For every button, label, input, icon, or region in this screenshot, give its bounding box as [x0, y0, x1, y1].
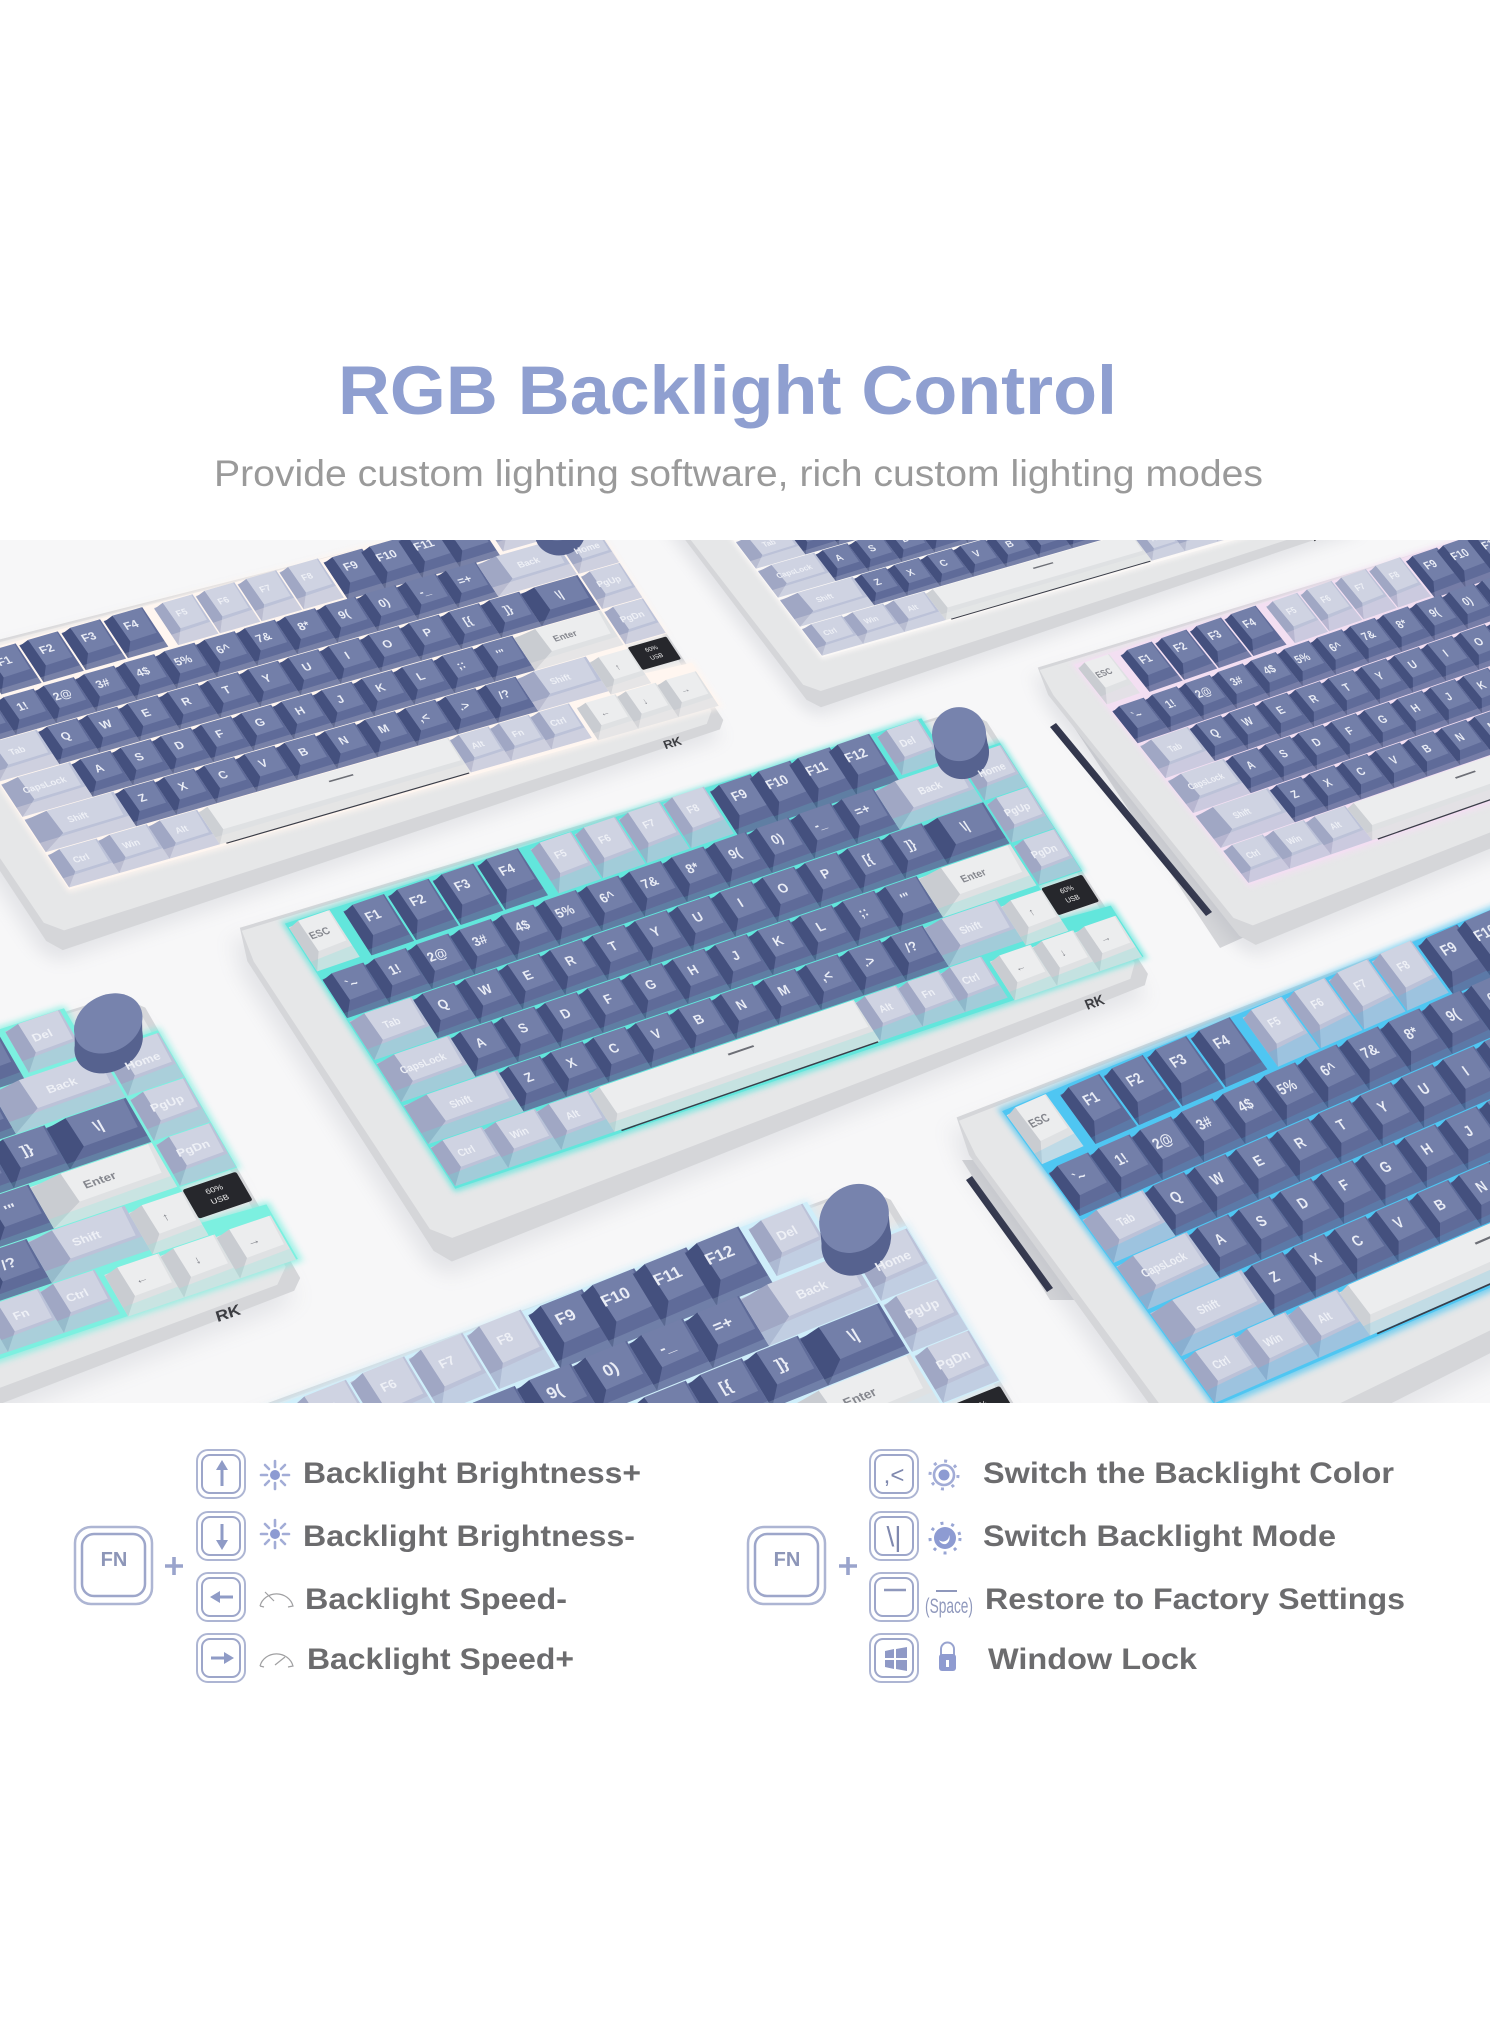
- keyboard: bottom centre, white-blue glow: [268, 1184, 1014, 1403]
- row: switch backlight mode: [870, 1512, 1336, 1560]
- row: switch backlight colour: Switch the Backlight Color: [983, 1457, 1394, 1490]
- row: backlight speed up: [197, 1634, 574, 1682]
- row: backlight speed up: Backlight Speed+: [307, 1643, 574, 1676]
- row: backlight brightness down: [197, 1512, 635, 1560]
- plus sign: [839, 1557, 857, 1575]
- row: backlight speed down: [197, 1573, 567, 1621]
- subtitle: Provide custom lighting software, rich custom lighting modes: [214, 453, 1263, 494]
- keyboard: top left, warm white glow: [0, 540, 724, 960]
- row: backlight brightness down: Backlight Brightness-: [303, 1520, 635, 1553]
- row: window lock: Window Lock: [988, 1643, 1197, 1676]
- title: RGB Backlight Control: [338, 352, 1117, 429]
- photo panel: keyboards with different backlight colours: [0, 540, 1490, 1403]
- row: restore to factory settings: [870, 1573, 1405, 1621]
- keyboard: bottom right, blue glow: [956, 902, 1490, 1403]
- row: restore to factory settings: (Space): [925, 1595, 973, 1618]
- row: switch backlight colour: ,<: [884, 1462, 904, 1489]
- keyboard side wall and underside: right: [1050, 723, 1242, 948]
- keyboard: centre, teal glow: [236, 707, 1150, 1274]
- FN key: [75, 1527, 152, 1604]
- row: backlight brightness up: [197, 1450, 641, 1498]
- row: window lock: [870, 1634, 1197, 1682]
- FN key: [748, 1527, 825, 1604]
- row: switch backlight mode: \|: [886, 1521, 902, 1552]
- row: backlight brightness up: Backlight Brightness+: [303, 1457, 641, 1490]
- legend: right shortcut group: [748, 1450, 1405, 1682]
- keyboard side wall and underside: bottom right: [962, 1160, 1074, 1300]
- keyboard: top centre, white glow: [672, 540, 1342, 716]
- FN key: FN: [101, 1549, 127, 1571]
- row: backlight speed down: Backlight Speed-: [305, 1583, 567, 1616]
- legend: left shortcut group: [75, 1450, 641, 1682]
- row: restore to factory settings: Restore to Factory Settings: [985, 1583, 1405, 1616]
- keyboard: right, pink glow: [1037, 540, 1490, 954]
- FN key: FN: [774, 1549, 800, 1571]
- row: switch backlight colour: [870, 1450, 1394, 1498]
- row: switch backlight mode: Switch Backlight Mode: [983, 1520, 1336, 1553]
- keyboard: left, cyan glow: [0, 993, 306, 1403]
- plus sign: [165, 1557, 183, 1575]
